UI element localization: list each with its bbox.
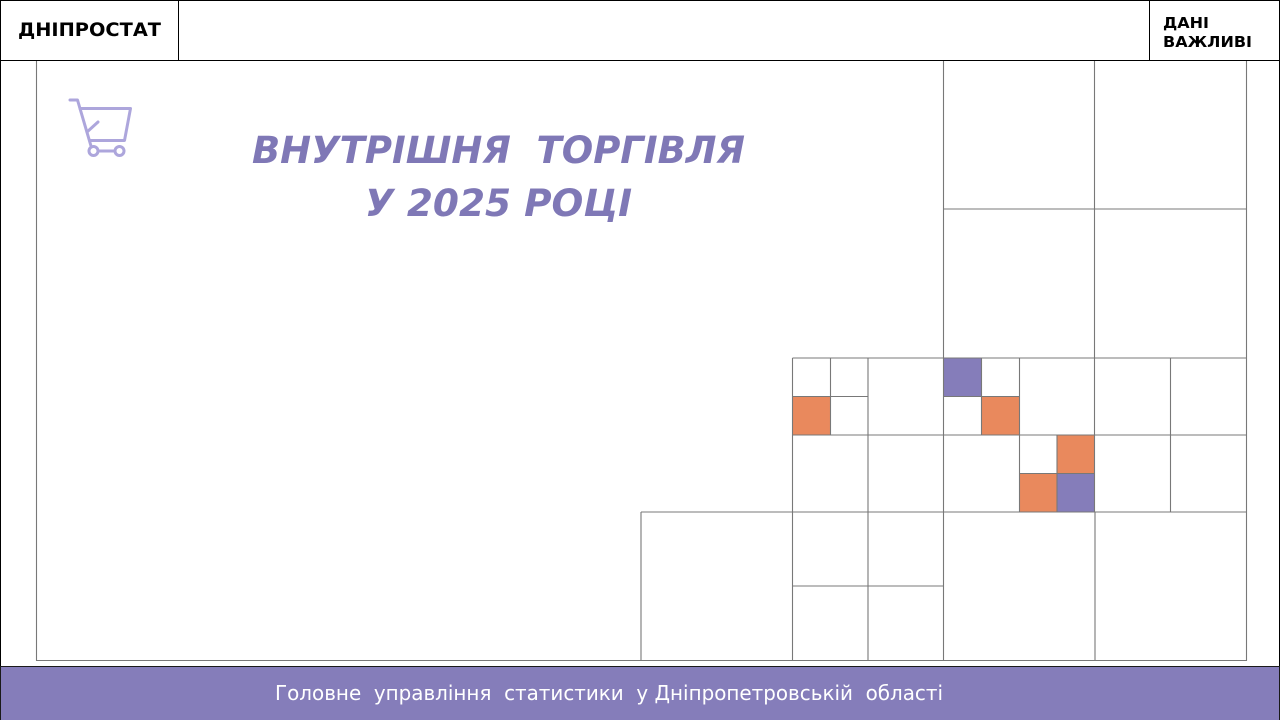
coloured square: purple top bbox=[944, 358, 982, 396]
header bar bbox=[0, 0, 1280, 60]
title: У 2025 РОЦІ bbox=[365, 182, 632, 225]
coloured square: orange middle bbox=[982, 396, 1020, 435]
coloured square: orange right lower bbox=[1020, 474, 1057, 512]
footer text: Головне управління статистики у Дніпропетровській області bbox=[275, 681, 943, 705]
icon: shopping cart bbox=[70, 100, 130, 156]
footer top and side border bbox=[0, 666, 1280, 720]
header tagline: ВАЖЛИВІ bbox=[1163, 33, 1252, 51]
title: ВНУТРІШНЯ ТОРГІВЛЯ bbox=[252, 129, 745, 172]
grid pattern with coloured squares bbox=[36, 60, 1246, 660]
footer band bbox=[0, 666, 1280, 720]
header tagline: ДАНІ bbox=[1163, 14, 1209, 32]
header logo text: ДНІПРОСТАТ bbox=[18, 19, 161, 41]
coloured square: purple right lower bbox=[1057, 474, 1095, 512]
header tagline bbox=[1163, 14, 1252, 51]
coloured square: orange right upper bbox=[1057, 435, 1095, 474]
title bbox=[252, 129, 745, 225]
coloured square: orange left bbox=[792, 396, 830, 435]
